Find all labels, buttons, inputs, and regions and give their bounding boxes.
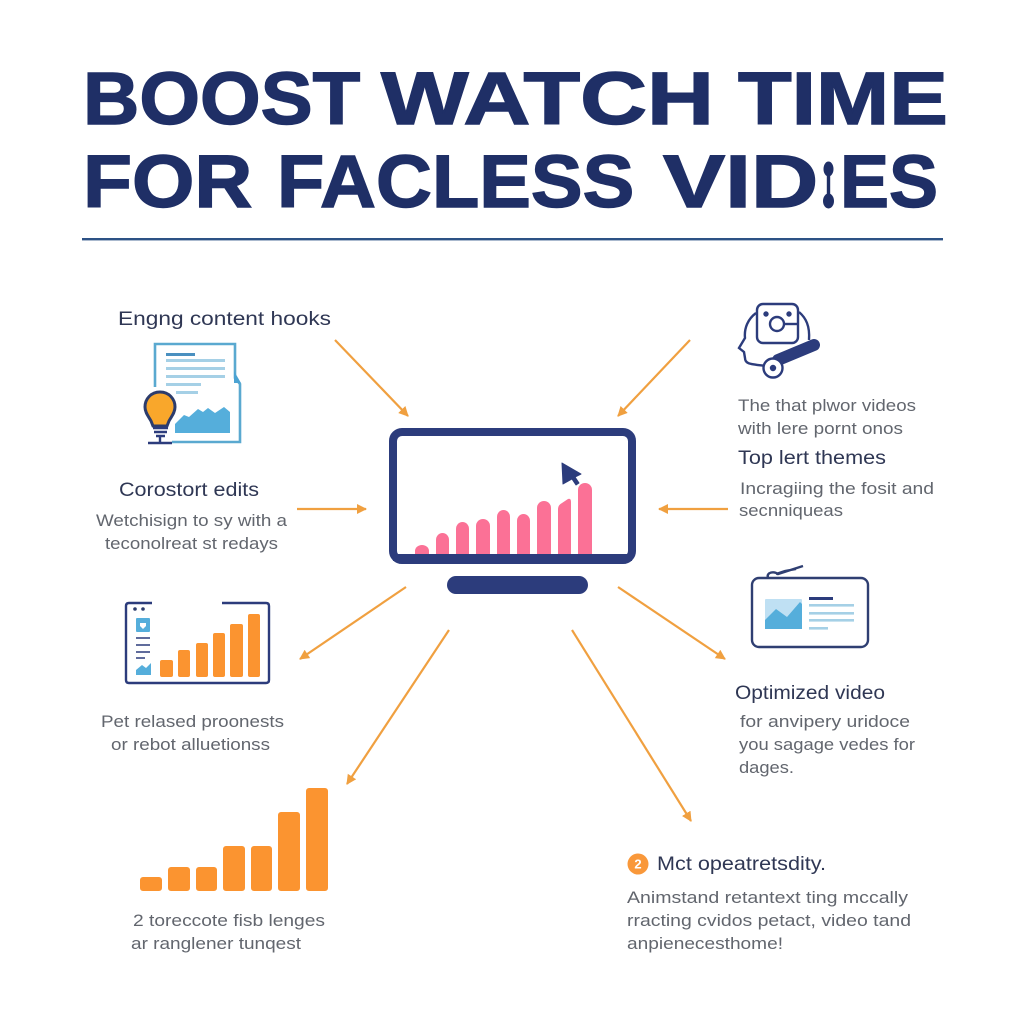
- numbered badge: [628, 854, 648, 874]
- text block: top themes: Incragiing the fosit and: [740, 479, 934, 498]
- text block: top themes: Top lert themes: [738, 447, 886, 469]
- title: VID: [663, 140, 818, 223]
- text block: optimized video: for anvipery uridoce: [740, 712, 910, 731]
- title: BOOST: [83, 58, 360, 141]
- text block: bottom right caption: rracting cvidos petact, video tand: [627, 911, 911, 930]
- text block: top themes: The that plwor videos: [738, 396, 916, 415]
- text block: bottom left caption: ar ranglener tunqest: [131, 934, 301, 953]
- text block: bottom left caption: 2 toreccote fisb lenges: [133, 911, 325, 930]
- icon: document with light bulb: [145, 344, 241, 443]
- text block: optimized video: dages.: [739, 758, 794, 777]
- text block: top themes: secnniqueas: [739, 501, 843, 520]
- icon: video card with chart: [752, 566, 868, 647]
- arrows radiating from monitor: [297, 340, 728, 821]
- title: WATCH: [381, 57, 714, 140]
- icon: head with camera and wrench: [739, 304, 814, 378]
- text block: consistent edits: Wetchisign to sy with a: [96, 511, 288, 530]
- text block: bottom right caption: anpienecesthome!: [627, 934, 783, 953]
- heading: engaging content hooks: Engng content hooks: [118, 308, 331, 330]
- text block: consistent edits: [96, 479, 288, 553]
- text block: consistent edits: Corostort edits: [119, 479, 259, 501]
- chart: large orange bars: [140, 788, 328, 891]
- title: FACLESS: [277, 141, 634, 224]
- text block: related prompts: [101, 712, 284, 754]
- text block: optimized video: you sagage vedes for: [739, 735, 915, 754]
- central monitor with pink bar chart: [393, 432, 632, 594]
- text block: optimized video: Optimized video: [735, 682, 885, 704]
- text block: related prompts: Pet relased proonests: [101, 712, 284, 731]
- title: [83, 57, 948, 224]
- text block: bottom right caption: Mct opeatretsdity.: [657, 853, 826, 875]
- numbered badge: 2: [634, 856, 642, 872]
- text block: related prompts: or rebot alluetionss: [111, 735, 270, 754]
- title: TIME: [738, 57, 948, 140]
- title: ES: [840, 140, 938, 223]
- text block: bottom right caption: Animstand retantext ting mccally: [627, 888, 909, 907]
- text block: top themes: with lere pornt onos: [737, 419, 903, 438]
- text block: optimized video: [735, 682, 915, 777]
- title: FOR: [83, 141, 252, 223]
- text block: consistent edits: teconolreat st redays: [105, 534, 278, 553]
- icon: dashboard with orange bars: [126, 603, 269, 683]
- text block: bottom left caption: [131, 911, 325, 953]
- text block: bottom right caption: [627, 853, 911, 953]
- text block: top themes: [737, 396, 934, 520]
